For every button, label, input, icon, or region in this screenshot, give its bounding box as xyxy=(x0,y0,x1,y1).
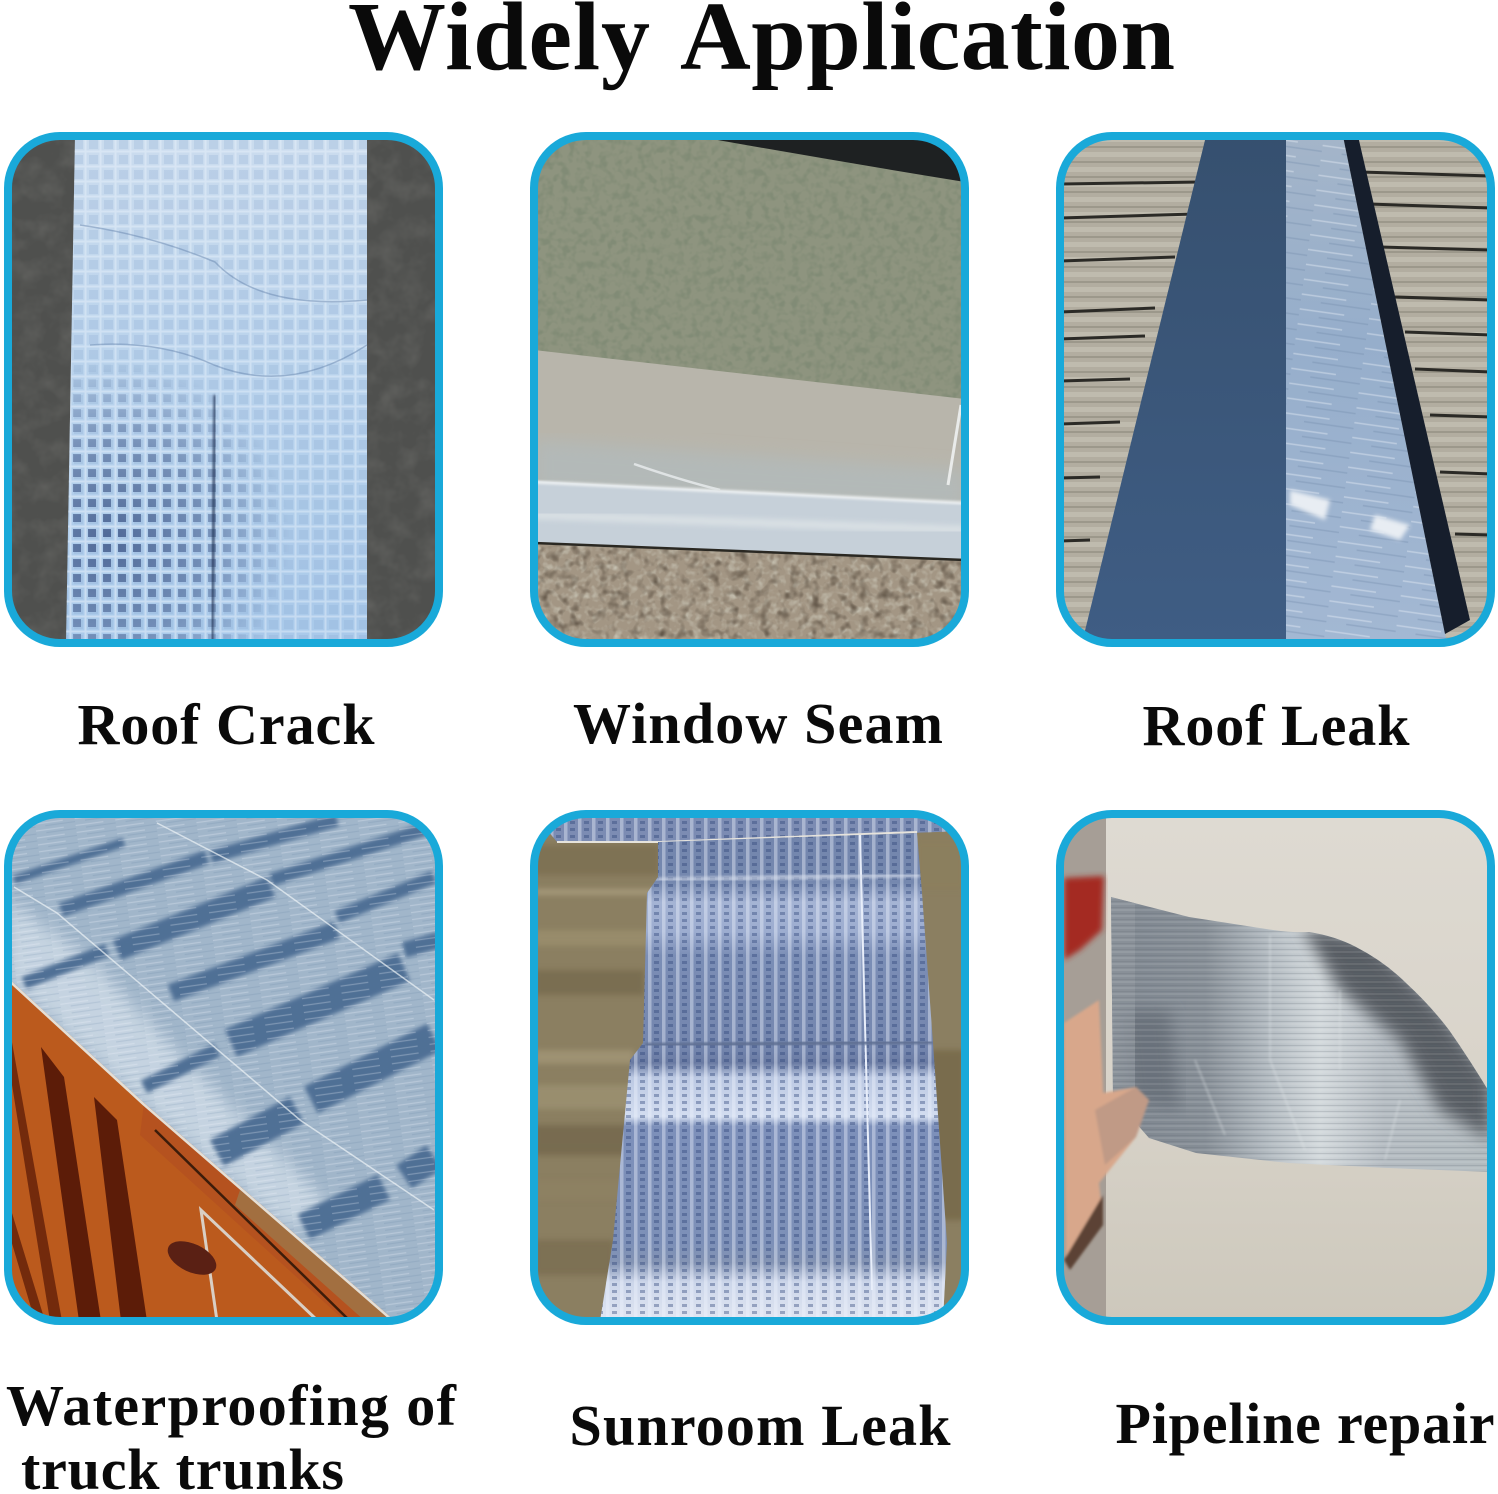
caption: roof leak: Roof Leak xyxy=(1142,693,1410,758)
caption: roof crack: Roof Crack xyxy=(78,692,375,757)
photo: concrete roof xyxy=(8,136,439,643)
photo: wooden slats xyxy=(1060,136,1491,643)
photo: red object xyxy=(1064,876,1104,960)
photo: background wall xyxy=(1064,818,1106,1316)
photo: granite ledge xyxy=(538,544,961,639)
panel: sunroom leak xyxy=(534,814,965,1325)
photo: foil tape strip xyxy=(66,136,367,643)
photo: foil-covered roof xyxy=(8,814,439,1321)
photo: white pipe xyxy=(1106,814,1491,1321)
photo: green stone carpet xyxy=(534,136,965,406)
photo: hand xyxy=(1064,1000,1149,1270)
caption: sunroom leak: Sunroom Leak xyxy=(570,1393,951,1458)
photo: foil tape with grid xyxy=(595,830,955,1325)
photo: dark blue tape side xyxy=(1082,136,1286,643)
caption: pipeline repair: Pipeline repair xyxy=(1116,1391,1494,1456)
photo: orange truck body xyxy=(12,982,390,1317)
photo: black edge strip xyxy=(1343,136,1470,634)
photo: silver tape wrap xyxy=(1105,890,1495,1180)
panel: roof leak xyxy=(1060,136,1491,643)
caption: window seam: Window Seam xyxy=(573,691,943,756)
photo: silver tape side xyxy=(1286,136,1447,643)
photo: silver sealing band xyxy=(534,350,965,561)
caption: truck trunks: Waterproofing of xyxy=(6,1373,457,1438)
panel: window seam xyxy=(534,136,965,643)
photo: wooden deck xyxy=(534,814,965,1321)
panel: roof crack xyxy=(8,136,439,643)
panel: pipeline repair xyxy=(1060,814,1495,1321)
panel: truck trunks xyxy=(8,814,439,1321)
photo: top foil strip xyxy=(550,818,946,842)
title xyxy=(348,0,1175,91)
